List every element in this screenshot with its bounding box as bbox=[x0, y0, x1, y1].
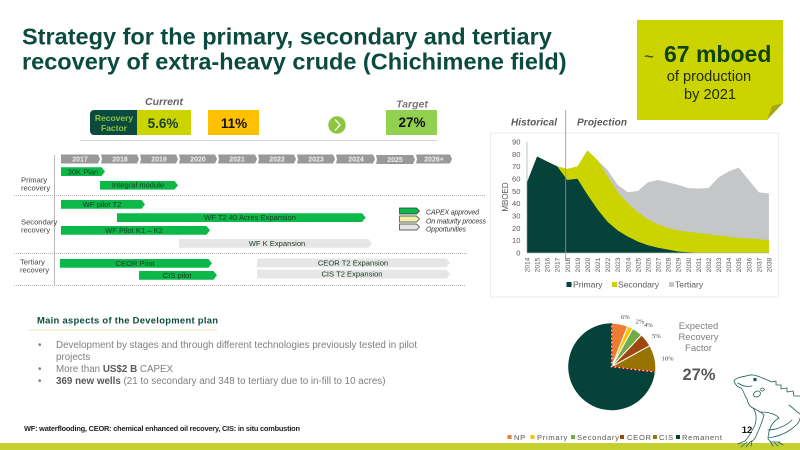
x axis labels: 2025 bbox=[635, 257, 642, 272]
recovery factor strip: Target bbox=[396, 98, 428, 110]
development plan text: • bbox=[38, 376, 42, 387]
activity bars: CEOR Pilot bbox=[116, 259, 155, 268]
y axis labels: 50 bbox=[512, 187, 520, 196]
development plan text: 369 new wells (21 to secondary and 348 to tertiary due to in-fill to 10 acres) bbox=[56, 376, 385, 387]
x axis labels: 2037 bbox=[756, 257, 763, 272]
y axis labels: 20 bbox=[512, 224, 520, 233]
x axis labels: 2015 bbox=[535, 257, 542, 272]
timeline years: 2022 bbox=[269, 156, 285, 164]
timeline years: 2017 bbox=[72, 156, 88, 164]
x axis labels: 2029 bbox=[676, 257, 683, 272]
recovery factor strip: 27% bbox=[398, 115, 426, 130]
y axis labels: 40 bbox=[512, 199, 520, 208]
title: Strategy for the primary, secondary and tertiary bbox=[22, 24, 552, 50]
historical and projection labels: Projection bbox=[577, 118, 627, 128]
x axis labels: 2021 bbox=[595, 257, 602, 272]
icon: iguana bbox=[734, 375, 800, 447]
activity bars: CEOR T2 Expansion bbox=[318, 258, 388, 267]
pie legend bbox=[508, 433, 723, 442]
gantt legend: On maturity process bbox=[426, 218, 486, 226]
activity bars: WF T2 40 Acres Expansion bbox=[204, 213, 296, 222]
y axis labels: 10 bbox=[512, 236, 520, 245]
recovery factor strip: 11% bbox=[221, 116, 247, 131]
x axis labels: 2036 bbox=[746, 257, 753, 272]
chart legend bbox=[566, 280, 704, 290]
row labels: recovery bbox=[21, 184, 50, 192]
timeline years: 2021 bbox=[229, 156, 245, 164]
timeline years: 2025 bbox=[387, 157, 403, 164]
row labels: Primary bbox=[21, 176, 47, 184]
x axis labels: 2016 bbox=[545, 257, 552, 272]
x axis labels: 2032 bbox=[706, 257, 713, 272]
callout: production target note: of production bbox=[667, 69, 751, 85]
pie data labels: 5% bbox=[652, 333, 661, 340]
x axis labels: 2030 bbox=[686, 257, 693, 272]
primary area bbox=[527, 157, 769, 253]
pie legend: CIS bbox=[659, 433, 674, 442]
activity bars: WF K Expansion bbox=[249, 239, 305, 248]
callout: production target note: ~ bbox=[644, 47, 654, 66]
x axis labels: 2038 bbox=[766, 257, 774, 272]
gantt legend: Opportunities bbox=[426, 226, 466, 234]
callout: production target note: by 2021 bbox=[684, 87, 736, 103]
expected recovery factor label: Expected bbox=[679, 321, 718, 332]
x axis labels: 2028 bbox=[666, 257, 673, 272]
timeline years: 2020 bbox=[190, 156, 206, 164]
title bbox=[22, 24, 567, 74]
x axis labels: 2035 bbox=[736, 257, 743, 272]
footer bar bbox=[0, 443, 800, 450]
y axis labels bbox=[512, 138, 520, 258]
historical and projection labels bbox=[511, 118, 627, 128]
gantt legend: CAPEX approved bbox=[426, 210, 480, 216]
development plan text: More than US$2 B CAPEX bbox=[56, 364, 174, 375]
y axis labels: 30 bbox=[512, 212, 520, 220]
x axis labels: 2022 bbox=[605, 257, 612, 272]
pie data labels: 2% bbox=[636, 318, 645, 326]
y axis labels: 0 bbox=[516, 248, 520, 258]
y axis labels: 90 bbox=[512, 138, 520, 146]
expected recovery factor label: Recovery bbox=[678, 332, 719, 343]
row labels bbox=[20, 176, 58, 274]
development plan text: Development by stages and through different technologies previously tested in pilot bbox=[56, 340, 417, 351]
recovery factor strip: 5.6% bbox=[148, 116, 178, 131]
page number: 12 bbox=[742, 425, 752, 436]
row labels: recovery bbox=[21, 226, 50, 234]
x axis labels: 2031 bbox=[696, 257, 703, 272]
pie legend: Remanent bbox=[682, 433, 723, 442]
x axis labels bbox=[524, 257, 774, 272]
activity bars: Integral module bbox=[112, 181, 164, 190]
development plan text bbox=[29, 314, 417, 387]
y axis labels: 70 bbox=[512, 162, 520, 171]
development plan text: Main aspects of the Development plan bbox=[37, 314, 218, 326]
historical and projection labels: Historical bbox=[511, 118, 557, 128]
timeline years: 2018 bbox=[112, 156, 128, 164]
y axis title: MBOED bbox=[501, 182, 510, 212]
secondary area bbox=[527, 150, 769, 253]
x axis labels: 2014 bbox=[524, 257, 532, 272]
development plan text: • bbox=[38, 340, 42, 351]
timeline years: 2019 bbox=[151, 156, 167, 164]
activity bars: WF Pilot K1 – K2 bbox=[105, 226, 163, 235]
pie legend: NP bbox=[514, 433, 526, 442]
timeline years: 2024 bbox=[348, 156, 364, 164]
row labels: Secondary bbox=[21, 218, 58, 226]
tertiary area bbox=[527, 150, 769, 253]
pie legend: CEOR bbox=[627, 433, 652, 442]
development plan text: projects bbox=[56, 352, 90, 363]
pie data labels: 6% bbox=[621, 314, 630, 321]
callout: production target note: 67 mboed bbox=[664, 41, 771, 67]
x axis labels: 2019 bbox=[575, 257, 582, 272]
x axis labels: 2018 bbox=[565, 257, 572, 272]
production area chart bbox=[490, 110, 778, 297]
chart legend: Primary bbox=[573, 280, 603, 290]
gantt legend bbox=[400, 208, 486, 234]
x axis labels: 2020 bbox=[585, 257, 592, 272]
pie data labels bbox=[621, 314, 674, 362]
row labels: Tertiary bbox=[20, 258, 45, 266]
activity bars bbox=[60, 167, 450, 280]
y axis labels: 80 bbox=[512, 150, 520, 159]
footnote: WF: waterflooding, CEOR: chemical enhanced oil recovery, CIS: in situ combustion bbox=[24, 424, 300, 433]
expected recovery factor label bbox=[678, 321, 719, 384]
callout: production target note bbox=[637, 20, 783, 120]
x axis labels: 2026 bbox=[646, 257, 652, 272]
pie data labels: 4% bbox=[644, 322, 653, 329]
activity bars: CIS pilot bbox=[163, 271, 192, 280]
pie data labels: 10% bbox=[662, 356, 674, 362]
recovery factor strip: Recovery bbox=[95, 113, 133, 123]
chart legend: Secondary bbox=[618, 280, 660, 290]
recovery factor strip: Current bbox=[145, 96, 183, 108]
x axis labels: 2027 bbox=[656, 257, 662, 272]
recovery factor strip: Factor bbox=[101, 123, 128, 133]
x axis labels: 2034 bbox=[726, 257, 733, 272]
expected recovery factor label: 27% bbox=[682, 366, 716, 384]
pie chart: expected recovery factor bbox=[568, 314, 674, 410]
x axis labels: 2017 bbox=[555, 257, 562, 272]
recovery factor strip bbox=[80, 96, 437, 140]
timeline years: 2026+ bbox=[424, 156, 444, 164]
pie legend: Primary bbox=[537, 433, 568, 442]
x axis labels: 2024 bbox=[625, 257, 632, 272]
timeline years bbox=[61, 154, 452, 164]
timeline years: 2023 bbox=[308, 156, 324, 164]
pie legend: Secondary bbox=[577, 433, 620, 442]
roadmap gantt bbox=[14, 154, 486, 286]
development plan text: • bbox=[38, 364, 42, 375]
chart legend: Tertiary bbox=[675, 280, 704, 290]
x axis labels: 2033 bbox=[716, 257, 723, 272]
x axis labels: 2023 bbox=[615, 257, 622, 272]
activity bars: 30K Plan bbox=[68, 168, 98, 176]
title: recovery of extra-heavy crude (Chichimene field) bbox=[22, 48, 567, 74]
expected recovery factor label: Factor bbox=[685, 343, 712, 354]
activity bars: WF pilot T2 bbox=[83, 200, 121, 209]
row labels: recovery bbox=[20, 266, 49, 274]
y axis labels: 60 bbox=[512, 174, 520, 184]
activity bars: CIS T2 Expansion bbox=[321, 270, 383, 279]
